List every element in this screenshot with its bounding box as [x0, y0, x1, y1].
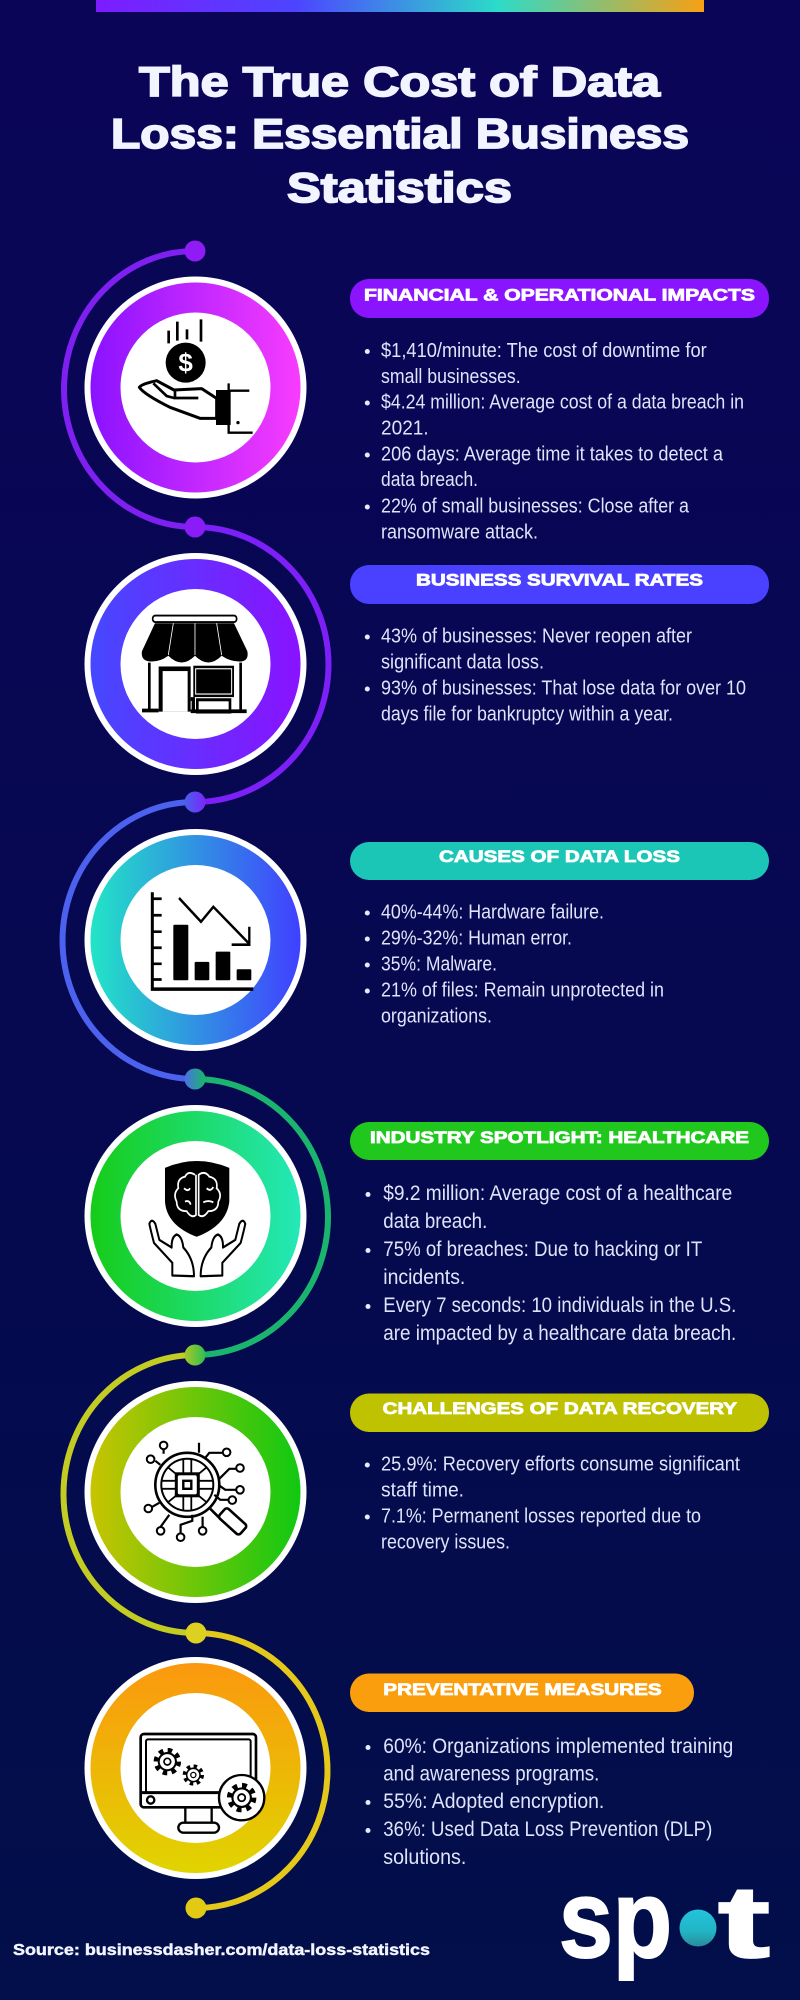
bullet list: [365, 902, 664, 1028]
bullet list: 22% of small businesses: Close after a: [381, 496, 690, 518]
bullet list: [365, 340, 744, 544]
panel: industry spotlight healthcare: [350, 1122, 769, 1345]
bullet list: $9.2 million: Average cost of a healthcare: [383, 1182, 732, 1205]
panel: healthcare badge: [84, 1105, 306, 1327]
panel: challenges of data recovery: [350, 1394, 769, 1554]
bullet list: are impacted by a healthcare data breach.: [383, 1322, 736, 1345]
bullet list: 35%: Malware.: [381, 954, 497, 976]
source line: Source: businessdasher.com/data-loss-statistics: [13, 1942, 430, 1959]
icon: coin falling into hand: [139, 319, 253, 433]
panel: recovery badge: [84, 1381, 306, 1603]
heading pill: CHALLENGES OF DATA RECOVERY: [383, 1399, 738, 1418]
title: Statistics: [287, 164, 512, 211]
title: [111, 58, 689, 211]
bullet list: days file for bankruptcy within a year.: [381, 704, 673, 726]
panel: prevention badge: [84, 1657, 306, 1879]
panel: financial badge: [84, 276, 306, 498]
bullet list: 93% of businesses: That lose data for over 10: [381, 678, 746, 700]
bullet list: 7.1%: Permanent losses reported due to: [381, 1506, 701, 1528]
bullet list: solutions.: [383, 1846, 466, 1869]
bullet list: data breach.: [383, 1210, 487, 1233]
bullet list: [366, 1182, 736, 1345]
heading pill: PREVENTATIVE MEASURES: [383, 1680, 662, 1699]
bullet list: Every 7 seconds: 10 individuals in the U.S.: [383, 1294, 736, 1317]
heading pill: INDUSTRY SPOTLIGHT: HEALTHCARE: [370, 1128, 749, 1147]
bullet list: 75% of breaches: Due to hacking or IT: [383, 1238, 702, 1261]
panel: business survival rates: [350, 565, 769, 726]
icon: declining bar chart: [152, 892, 253, 989]
bullet list: data breach.: [381, 469, 478, 491]
bullet list: 55%: Adopted encryption.: [383, 1790, 604, 1813]
panel: preventative measures: [350, 1674, 733, 1869]
bullet list: 43% of businesses: Never reopen after: [381, 626, 692, 648]
bullet list: 36%: Used Data Loss Prevention (DLP): [383, 1818, 712, 1841]
timeline nodes: [184, 240, 206, 1918]
bullet list: 40%-44%: Hardware failure.: [381, 902, 604, 924]
bullet list: 29%-32%: Human error.: [381, 928, 572, 950]
icon: monitor with gears: [141, 1734, 264, 1833]
top gradient bar: [96, 0, 704, 12]
panel: causes of data loss: [350, 842, 769, 1028]
logo: spot: sp: [559, 1858, 672, 1981]
bullet list: [365, 1454, 740, 1554]
bullet list: 60%: Organizations implemented training: [383, 1735, 733, 1758]
icon: brain shield in hands: [149, 1161, 245, 1276]
panel: survival badge: [84, 553, 306, 775]
bullet list: staff time.: [381, 1480, 464, 1502]
bullet list: [366, 1735, 733, 1869]
heading pill: [350, 1674, 694, 1712]
heading pill: [350, 1122, 769, 1160]
bullet list: ransomware attack.: [381, 522, 538, 544]
heading pill: FINANCIAL & OPERATIONAL IMPACTS: [364, 286, 755, 304]
title: Loss: Essential Business: [111, 110, 689, 157]
bullet list: 206 days: Average time it takes to detect a: [381, 444, 724, 466]
panel: financial and operational impacts: [350, 279, 769, 544]
bullet list: small businesses.: [381, 366, 521, 388]
icon: coin falling into hand: $: [178, 347, 193, 377]
bullet list: 2021.: [381, 418, 429, 440]
timeline connector arcs: [63, 251, 328, 1908]
bullet list: $1,410/minute: The cost of downtime for: [381, 340, 707, 362]
bullet list: 25.9%: Recovery efforts consume significant: [381, 1454, 740, 1476]
heading pill: [350, 279, 769, 318]
logo: spot: t: [718, 1865, 770, 1979]
bullet list: recovery issues.: [381, 1532, 510, 1554]
panel: causes badge: [84, 829, 306, 1051]
title: The True Cost of Data: [139, 58, 661, 105]
bullet list: incidents.: [383, 1266, 465, 1289]
icon: storefront: [142, 616, 248, 712]
heading pill: [350, 1394, 769, 1432]
bullet list: organizations.: [381, 1006, 492, 1028]
bullet list: and awareness programs.: [383, 1762, 599, 1786]
bullet list: [365, 626, 746, 726]
bullet list: $4.24 million: Average cost of a data breach in: [381, 392, 744, 414]
heading pill: [350, 842, 769, 880]
icon: circuit magnifier: [144, 1442, 247, 1541]
heading pill: BUSINESS SURVIVAL RATES: [416, 571, 703, 590]
heading pill: [350, 565, 769, 604]
bullet list: 21% of files: Remain unprotected in: [381, 980, 664, 1002]
heading pill: CAUSES OF DATA LOSS: [439, 847, 680, 866]
logo: spot: [559, 1858, 770, 1981]
bullet list: significant data loss.: [381, 652, 544, 674]
